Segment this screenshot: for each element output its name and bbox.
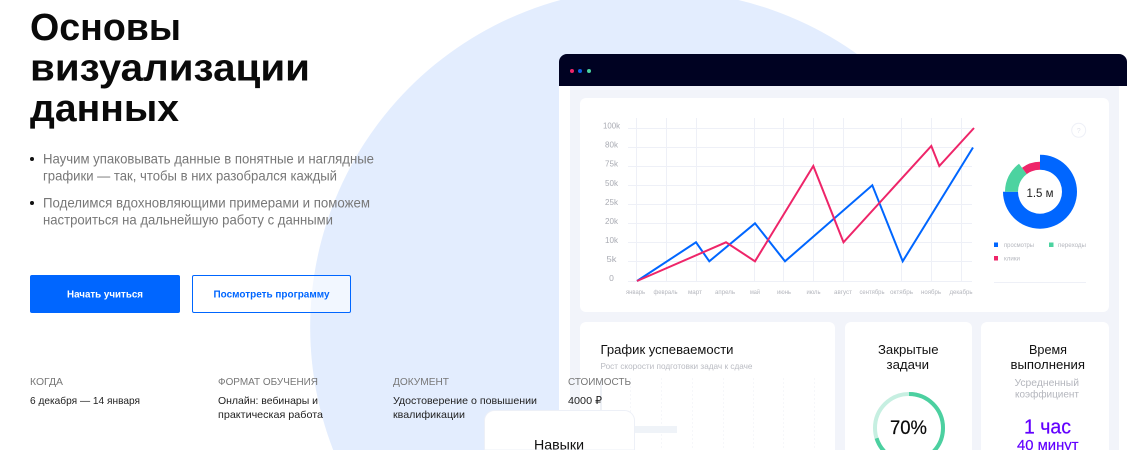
completion time subtitle: коэффициент bbox=[1015, 388, 1079, 400]
closed tasks heading: задачи bbox=[886, 357, 929, 372]
button: view program: Посмотреть программу bbox=[214, 288, 330, 300]
x axis labels: февраль bbox=[654, 290, 678, 296]
course meta: price bbox=[568, 376, 631, 407]
y axis labels: 25k bbox=[605, 197, 619, 207]
completion time heading bbox=[1010, 342, 1085, 372]
donut chart bbox=[1003, 155, 1077, 229]
course meta: document: Удостоверение о повышении bbox=[393, 395, 537, 407]
blue line bbox=[637, 148, 973, 281]
course meta: format bbox=[218, 376, 323, 421]
course meta: document: ДОКУМЕНТ bbox=[393, 376, 450, 388]
progress chart heading: График успеваемости bbox=[600, 342, 734, 357]
window frame bbox=[559, 54, 1127, 450]
x axis labels bbox=[626, 289, 972, 296]
button: start learning bbox=[30, 275, 180, 313]
donut legend: переходы bbox=[1058, 243, 1086, 249]
skills card bbox=[484, 410, 634, 452]
x axis labels: ноябрь bbox=[921, 290, 941, 296]
donut legend: клики bbox=[1004, 256, 1020, 262]
course meta: when bbox=[30, 376, 140, 407]
y axis labels: 80k bbox=[605, 140, 619, 150]
background circle bbox=[310, 0, 999, 450]
completion time heading: выполнения bbox=[1010, 357, 1085, 372]
x axis labels: октябрь bbox=[890, 290, 913, 296]
bullet list bbox=[30, 150, 374, 228]
y axis labels: 5k bbox=[606, 254, 617, 264]
closed tasks heading: Закрытые bbox=[878, 342, 938, 357]
title: визуализации bbox=[30, 48, 310, 90]
course meta: format: Онлайн: вебинары и bbox=[218, 395, 318, 407]
y axis labels: 100k bbox=[603, 120, 621, 130]
course meta: format: ФОРМАТ ОБУЧЕНИЯ bbox=[218, 376, 318, 388]
completion time heading: Время bbox=[1029, 342, 1067, 357]
title bbox=[30, 7, 310, 130]
course meta: when: 6 декабря — 14 января bbox=[30, 395, 140, 407]
x axis labels: март bbox=[688, 290, 702, 296]
x axis labels: май bbox=[750, 289, 760, 296]
panel: completion time bbox=[981, 322, 1109, 454]
panel: analytics bbox=[580, 98, 1109, 312]
bullet list: Поделимся вдохновляющими примерами и поможем bbox=[43, 194, 370, 210]
course meta: format: практическая работа bbox=[218, 409, 323, 421]
course meta: price: СТОИМОСТЬ bbox=[568, 376, 631, 388]
red line bbox=[637, 128, 974, 281]
x axis labels: август bbox=[834, 290, 852, 296]
x axis labels: декабрь bbox=[950, 290, 972, 296]
x axis labels: январь bbox=[626, 290, 645, 296]
x axis labels: июль bbox=[806, 290, 820, 296]
x axis labels: сентябрь bbox=[860, 290, 884, 296]
y axis labels: 50k bbox=[605, 178, 619, 188]
y axis labels: 75k bbox=[605, 158, 619, 168]
course meta: when: КОГДА bbox=[30, 376, 63, 388]
icon: help bbox=[1072, 123, 1086, 137]
title: Основы bbox=[30, 7, 181, 49]
x axis labels: апрель bbox=[715, 290, 735, 296]
bullet list: настроиться на дальнейшую работу с данными bbox=[43, 212, 333, 228]
progress ring: 70% bbox=[890, 418, 927, 439]
y axis labels: 0 bbox=[609, 273, 614, 283]
window header bbox=[559, 54, 1127, 86]
course meta: price: 4000 ₽ bbox=[568, 395, 602, 407]
window dots bbox=[570, 69, 591, 73]
y axis labels: 20k bbox=[605, 216, 619, 226]
completion time value: 1 час bbox=[1024, 416, 1071, 438]
bullet list: Научим упаковывать данные в понятные и наглядные bbox=[43, 150, 374, 166]
y axis labels bbox=[603, 120, 621, 283]
button: start learning: Начать учиться bbox=[67, 288, 143, 300]
completion time subtitle: Усредненный bbox=[1014, 377, 1079, 389]
bullet list: графики — так, чтобы в них разобрался каждый bbox=[43, 168, 337, 184]
panel: closed tasks bbox=[845, 322, 972, 462]
progress chart grid bbox=[600, 378, 814, 450]
progress chart subtitle: Рост скорости подготовки задач к сдаче bbox=[600, 361, 753, 371]
panel: progress chart bbox=[580, 322, 835, 450]
donut legend: просмотры bbox=[1004, 243, 1034, 249]
line chart bbox=[603, 118, 974, 296]
closed tasks heading bbox=[878, 342, 938, 372]
icon: help: ? bbox=[1077, 128, 1081, 135]
button: view program bbox=[192, 276, 350, 312]
completion time value bbox=[1017, 416, 1079, 454]
donut chart: 1.5 м bbox=[1026, 188, 1054, 200]
course meta: document bbox=[393, 376, 537, 421]
donut legend bbox=[994, 242, 1086, 283]
y axis labels: 10k bbox=[605, 235, 619, 245]
x axis labels: июнь bbox=[777, 290, 791, 296]
course meta: document: квалификации bbox=[393, 409, 465, 421]
title: данных bbox=[30, 88, 179, 130]
completion time subtitle bbox=[1014, 377, 1079, 400]
